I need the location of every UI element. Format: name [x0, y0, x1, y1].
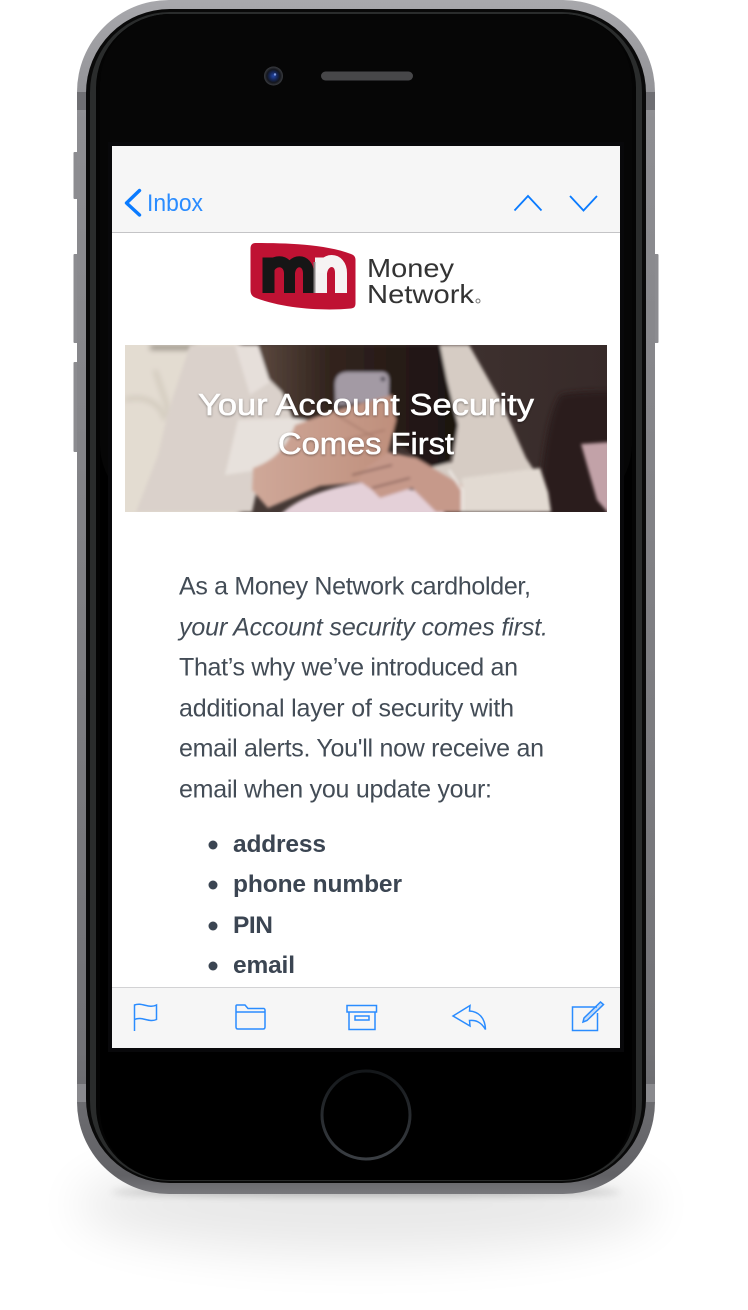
icon: folder [236, 1005, 265, 1029]
antenna bands [77, 92, 655, 1102]
inbox link: Inbox [147, 190, 203, 217]
metal frame [77, 0, 655, 1194]
icon: archive box [347, 1006, 376, 1030]
home button [322, 1071, 410, 1159]
chest [226, 416, 309, 474]
phone body [74, 0, 658, 1194]
speaker [321, 72, 413, 80]
bullet list [208, 831, 402, 979]
sleeve cuff [449, 470, 462, 512]
hair [255, 345, 458, 470]
hero photo: woman holding phone [125, 345, 607, 512]
body paragraph: email when you update your: [179, 776, 492, 804]
hero title: Your Account Security [198, 387, 535, 422]
logo badge [250, 243, 356, 309]
hero title: Comes First [278, 426, 454, 461]
floor shadow [76, 1155, 656, 1255]
pink pillow [581, 442, 610, 515]
logo letters mn [268, 258, 341, 293]
logo: Network [367, 279, 475, 309]
bottom toolbar [112, 987, 620, 1048]
left arm shirt [136, 345, 292, 512]
bullet list: PIN [233, 912, 273, 939]
blanket [280, 482, 446, 515]
bullet list: email [233, 952, 295, 979]
icon: reply [453, 1006, 486, 1030]
top navigation bar [112, 146, 620, 233]
body paragraph: As a Money Network cardholder, [179, 572, 531, 600]
body paragraph: That’s why we’ve introduced an [179, 654, 518, 682]
icon: flag [134, 1004, 156, 1031]
hero banner [125, 345, 607, 512]
screen [112, 146, 620, 1048]
side buttons [74, 152, 658, 452]
phone [332, 368, 392, 411]
bullet list: address [233, 831, 326, 858]
body paragraph: additional layer of security with [179, 694, 514, 722]
bullet list: phone number [233, 871, 402, 898]
icon: compose [572, 1007, 598, 1030]
body paragraph: your Account security comes first. [177, 614, 548, 642]
icon: back chevron [126, 190, 140, 215]
icon: next arrow [570, 196, 597, 210]
left hand [252, 395, 396, 508]
icon: previous arrow [514, 196, 542, 210]
camera [264, 66, 283, 86]
hero title [198, 387, 535, 461]
right hand [358, 452, 462, 512]
right arm shirt [430, 345, 534, 486]
logo [250, 243, 480, 309]
logo wordmark: Money [367, 253, 454, 283]
body paragraph: email alerts. You'll now receive an [179, 734, 544, 762]
body paragraph [177, 572, 548, 804]
